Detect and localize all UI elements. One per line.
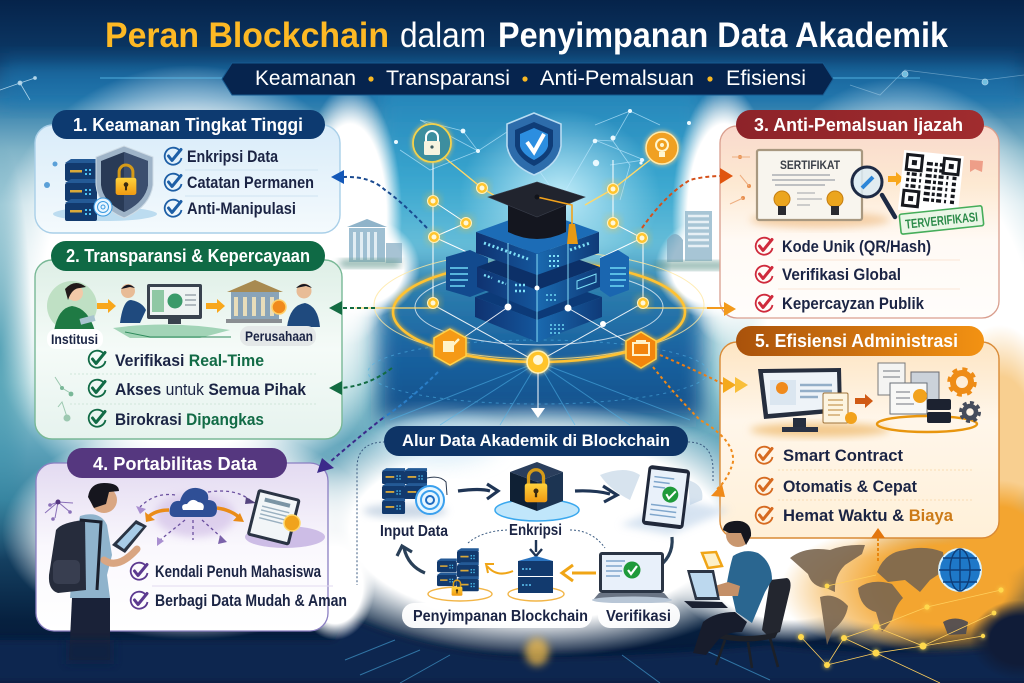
skyline right — [655, 211, 725, 269]
world map and globe — [790, 528, 1004, 683]
arrow: orange dashed to panel 5 — [660, 355, 748, 393]
checklist 2 — [55, 351, 318, 429]
panel 4: portabilitas — [36, 448, 375, 664]
title: Penyimpanan Data Akademik — [498, 16, 948, 55]
checklist 2: Akses untuk Semua Pihak — [115, 381, 307, 399]
step: laptop verifikasi — [592, 552, 672, 604]
top tier — [476, 210, 599, 275]
arrow: purple dashed to panel 4 — [317, 372, 438, 473]
panel 2: transparansi — [35, 241, 342, 439]
checklist 4: Berbagi Data Mudah & Aman — [155, 592, 347, 610]
heading pill 2 — [51, 241, 325, 271]
arrow: tablet to laptop — [651, 537, 672, 571]
heading pill 3 — [736, 110, 984, 139]
heading pill 5: 5. Efisiensi Administrasi — [755, 330, 958, 351]
checklist 1 — [165, 148, 318, 218]
heading pill 2: 2. Transparansi & Kepercayaan — [66, 245, 310, 266]
certificate and QR illustration: TERVERIFIKASI — [904, 209, 979, 232]
icon: padlock circle — [413, 124, 451, 162]
checklist 1: Enkripsi Data — [187, 148, 279, 166]
icon: shield top — [507, 113, 561, 175]
checklist 3: Kode Unik (QR/Hash) — [782, 238, 931, 256]
checklist 1: Anti-Manipulasi — [187, 200, 296, 218]
subtitle bar: Transparansi — [386, 67, 510, 90]
label perusahaan — [240, 326, 316, 346]
heading pill 3: 3. Anti-Pemalsuan Ijazah — [754, 114, 963, 135]
icon: server shield — [44, 146, 157, 221]
central server stack — [430, 210, 643, 362]
checklist 4: Kendali Penuh Mahasiswa — [155, 563, 322, 581]
arrow: orange to panel 3 bottom — [707, 302, 736, 316]
checklist 1: Catatan Permanen — [187, 174, 314, 192]
label institusi: Institusi — [51, 331, 98, 347]
network nodes — [426, 181, 650, 327]
flow heading: Alur Data Akademik di Blockchain — [402, 431, 670, 450]
heading pill 1 — [52, 110, 325, 139]
checklist 3 — [756, 238, 960, 313]
network constellation — [400, 111, 660, 200]
constellation dots — [394, 109, 691, 166]
step: tablet verification — [600, 465, 730, 535]
cloud sharing illustration — [45, 488, 325, 548]
arrow: green dashed to panel 2 bottom — [329, 368, 392, 395]
bottom tier — [475, 275, 602, 342]
step: enkripsi: Enkripsi — [509, 522, 562, 539]
heading pill 4 — [67, 448, 287, 478]
arrow: green dashed to panel 2 top — [329, 301, 375, 315]
skyline left — [340, 219, 402, 267]
checklist 3: Kepercayzan Publik — [782, 295, 925, 313]
title — [105, 16, 948, 55]
title: Peran Blockchain — [105, 16, 389, 55]
heading pill 5 — [736, 326, 984, 356]
central gold node with arrow — [527, 351, 549, 418]
middle tier — [477, 245, 600, 312]
subtitle bar: Keamanan — [255, 67, 356, 90]
flow section — [357, 426, 730, 628]
step: storage cluster — [428, 548, 492, 601]
arrow: encrypt to storage — [530, 540, 542, 556]
step: enkripsi — [495, 462, 579, 539]
arrow: input to encrypt — [458, 484, 498, 499]
continents — [790, 545, 968, 645]
glowing edges — [430, 243, 643, 362]
heading pill 4: 4. Portabilitas Data — [93, 453, 258, 474]
dotted frame — [357, 442, 713, 585]
subtitle bar: Efisiensi — [726, 67, 806, 90]
step: blockchain server — [508, 556, 564, 601]
gold nodes — [798, 584, 1004, 668]
certificate and QR illustration: SERTIFIKAT — [780, 158, 841, 172]
label penyimpanan: Penyimpanan Blockchain — [413, 608, 588, 625]
rings — [355, 251, 708, 362]
perspective grid lines — [345, 340, 770, 683]
hexagon icon right — [626, 332, 656, 368]
globe — [939, 549, 981, 591]
checklist 3: Verifikasi Global — [782, 266, 901, 284]
arrow: orange dashed to tablet — [653, 367, 733, 497]
gold network — [801, 575, 1001, 683]
checklist 4 — [131, 563, 347, 610]
person with laptop — [684, 521, 791, 668]
checklist 5: Smart Contract — [783, 447, 903, 465]
corner constellations — [0, 70, 1024, 100]
side blocks — [446, 250, 629, 297]
flow illustration — [47, 280, 320, 338]
panel 1: keamanan — [35, 110, 340, 233]
graduation cap — [488, 182, 585, 244]
checklist 2: Verifikasi Real-Time — [115, 352, 264, 370]
panel 3: anti-pemalsuan — [720, 110, 999, 318]
label perusahaan: Perusahaan — [245, 328, 313, 344]
arrow: laptop to storage — [562, 565, 596, 581]
heading pill 1: 1. Keamanan Tingkat Tinggi — [73, 114, 303, 135]
checklist 5: Otomatis & Cepat — [783, 478, 917, 496]
subtitle bar — [100, 63, 920, 95]
connections from center — [433, 158, 650, 303]
label verifikasi: Verifikasi — [606, 608, 671, 625]
arrow: storage to input — [397, 546, 425, 573]
icon: bulb circle — [646, 132, 678, 164]
step: input data: Input Data — [380, 523, 448, 540]
arrow: red dashed to panel 3 — [642, 168, 733, 228]
panel 5: efisiensi — [720, 326, 999, 538]
checklist 5 — [756, 447, 972, 525]
student figure — [49, 483, 147, 664]
subtitle bar: Anti-Pemalsuan — [540, 67, 694, 90]
up arrow — [871, 528, 885, 562]
title: dalam — [400, 16, 486, 55]
checklist 2: Birokrasi Dipangkas — [115, 411, 264, 429]
flow heading — [384, 426, 688, 456]
arrow: blue dashed to panel 1 — [331, 170, 427, 228]
certificate and QR illustration — [730, 150, 984, 234]
step: input data — [363, 468, 448, 540]
administration illustration — [750, 363, 980, 437]
label penyimpanan — [402, 603, 592, 628]
checklist 5: Hemat Waktu & Biaya — [783, 507, 954, 525]
gold cycle arrows — [486, 564, 513, 574]
hexagon icon left — [434, 329, 466, 365]
label verifikasi — [598, 603, 680, 628]
arrow: encrypt to tablet — [575, 486, 617, 502]
